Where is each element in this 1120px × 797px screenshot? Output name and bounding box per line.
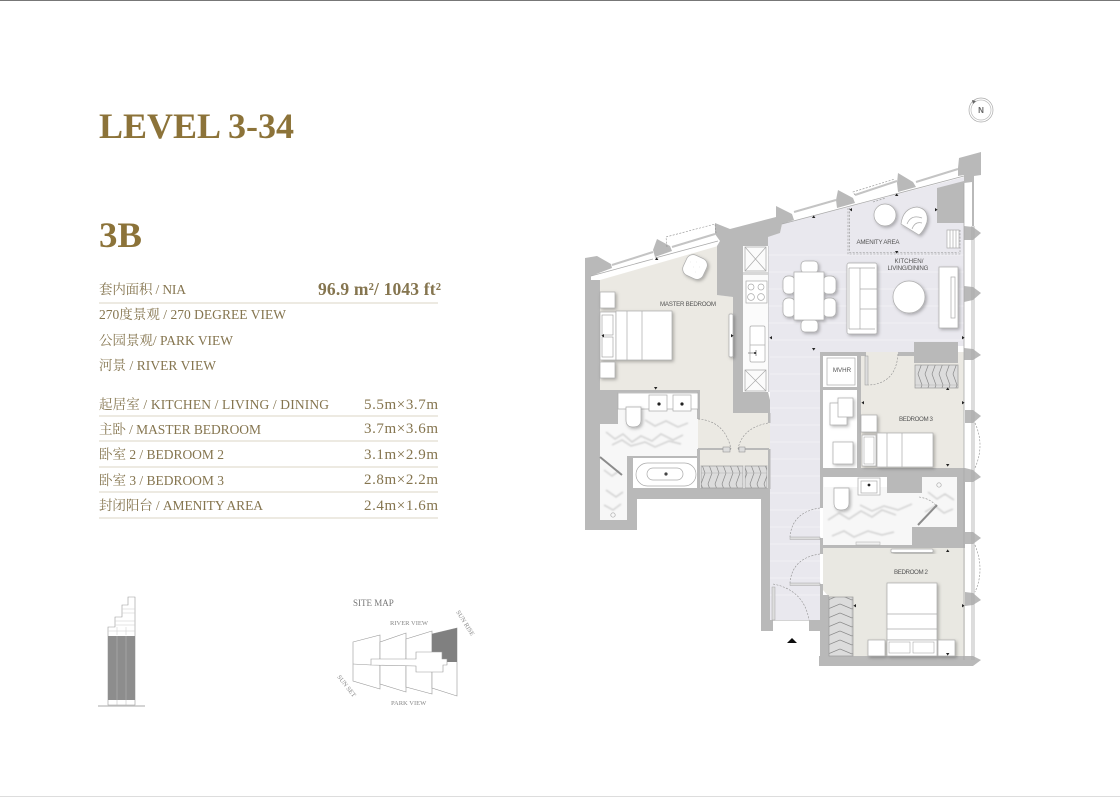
unit features list: 河景 / RIVER VIEW xyxy=(99,358,216,373)
room dimensions table: 3.1m×2.9m xyxy=(364,447,438,463)
bedroom 3 wardrobe xyxy=(915,365,958,388)
floor: living and corridor xyxy=(768,177,964,620)
site map: SUN RISE xyxy=(454,609,475,637)
furniture: amenity chair xyxy=(901,207,927,235)
room dimensions table: 2.8m×2.2m xyxy=(364,472,438,488)
room labels: MASTER BEDROOM xyxy=(660,301,716,308)
floor: bedroom 2 xyxy=(823,548,965,656)
wall: master bedroom and kitchen xyxy=(715,206,794,413)
site map: SUN SET xyxy=(335,674,357,699)
floor: bathrooms xyxy=(600,392,957,545)
hob xyxy=(746,281,767,303)
unit features list: 套内面积 / NIA xyxy=(99,281,186,297)
glazing lines xyxy=(591,169,974,660)
unit features list: 270度景观 / 270 DEGREE VIEW xyxy=(99,306,286,322)
wall: north mullions and corner xyxy=(653,152,981,257)
unit features list: 公园景观/ PARK VIEW xyxy=(99,333,233,348)
master vanity xyxy=(618,393,698,411)
amenity area outline xyxy=(848,208,960,254)
master bed xyxy=(600,292,672,378)
furniture: coffee table xyxy=(893,281,925,313)
wall: west facade and master bath xyxy=(585,256,773,631)
furniture: sofa xyxy=(847,263,877,334)
kitchen xyxy=(743,246,768,392)
corridor doors xyxy=(772,508,820,620)
wall: east fins xyxy=(964,226,981,606)
bedroom 2 wardrobe xyxy=(829,597,853,656)
room dimensions table xyxy=(99,396,438,518)
room labels: BEDROOM 2 xyxy=(894,569,929,576)
living floor boards xyxy=(768,255,964,595)
site map: PARK VIEW xyxy=(391,700,427,707)
floor: master bedroom xyxy=(600,246,770,466)
room dimensions table: 3.7m×3.6m xyxy=(364,421,438,437)
title: LEVEL 3-34 xyxy=(99,106,294,146)
room labels: BEDROOM 3 xyxy=(899,416,934,423)
master wardrobes xyxy=(701,466,767,488)
room dimensions table: 卧室 2 / BEDROOM 2 xyxy=(99,446,224,462)
view direction markers xyxy=(601,193,965,656)
icon: north compass: N xyxy=(978,106,984,115)
bedroom 2 tv xyxy=(891,549,933,552)
master tv xyxy=(729,314,733,357)
bedroom 2 bed xyxy=(868,583,955,656)
floor: bedroom 3 xyxy=(860,352,964,468)
room dimensions table: 卧室 3 / BEDROOM 3 xyxy=(99,472,224,488)
mvhr cupboard xyxy=(823,356,857,387)
master doors xyxy=(698,419,768,452)
entrance arrow xyxy=(787,638,797,643)
unit heading: 3B xyxy=(99,215,142,255)
room dimensions table: 封闭阳台 / AMENITY AREA xyxy=(99,497,263,513)
amenity rack xyxy=(947,230,959,248)
bedroom 3 door xyxy=(865,354,898,385)
tower elevation xyxy=(98,597,145,706)
site map: SITE MAP xyxy=(353,598,394,608)
room dimensions table: 2.4m×1.6m xyxy=(364,498,438,514)
site map: RIVER VIEW xyxy=(390,620,429,627)
room labels: AMENITY AREA xyxy=(856,239,900,246)
dashed window openings xyxy=(666,179,980,592)
bedroom 3 bed xyxy=(861,415,933,467)
room dimensions table: 主卧 / MASTER BEDROOM xyxy=(99,421,261,437)
unit features list xyxy=(99,279,441,373)
furniture: master bedroom xyxy=(600,252,733,378)
master toilet xyxy=(626,407,641,427)
mvhr cupboard: MVHR xyxy=(833,367,852,374)
icon: north compass xyxy=(969,98,993,122)
furniture: dining set xyxy=(783,261,836,332)
study room with desk xyxy=(823,390,857,468)
room labels: KITCHEN/ xyxy=(895,258,924,265)
furniture: tv unit xyxy=(939,267,958,328)
room dimensions table: 起居室 / KITCHEN / LIVING / DINING xyxy=(99,396,329,412)
shower glass xyxy=(600,457,622,517)
furniture: amenity table xyxy=(874,204,896,226)
bathroom 2 fixtures xyxy=(824,477,941,545)
bath tub xyxy=(633,458,697,488)
room dimensions table: 5.5m×3.7m xyxy=(364,397,438,413)
armchair xyxy=(680,252,710,282)
kitchen sink xyxy=(748,326,765,362)
room labels xyxy=(660,239,934,576)
marble veining xyxy=(604,310,954,537)
room labels: LIVING/DINING xyxy=(888,265,929,272)
floor plan xyxy=(585,152,981,666)
site map xyxy=(335,598,475,707)
wall: internal partitions xyxy=(600,342,981,666)
unit features list: 96.9 m²/ 1043 ft² xyxy=(318,279,441,299)
